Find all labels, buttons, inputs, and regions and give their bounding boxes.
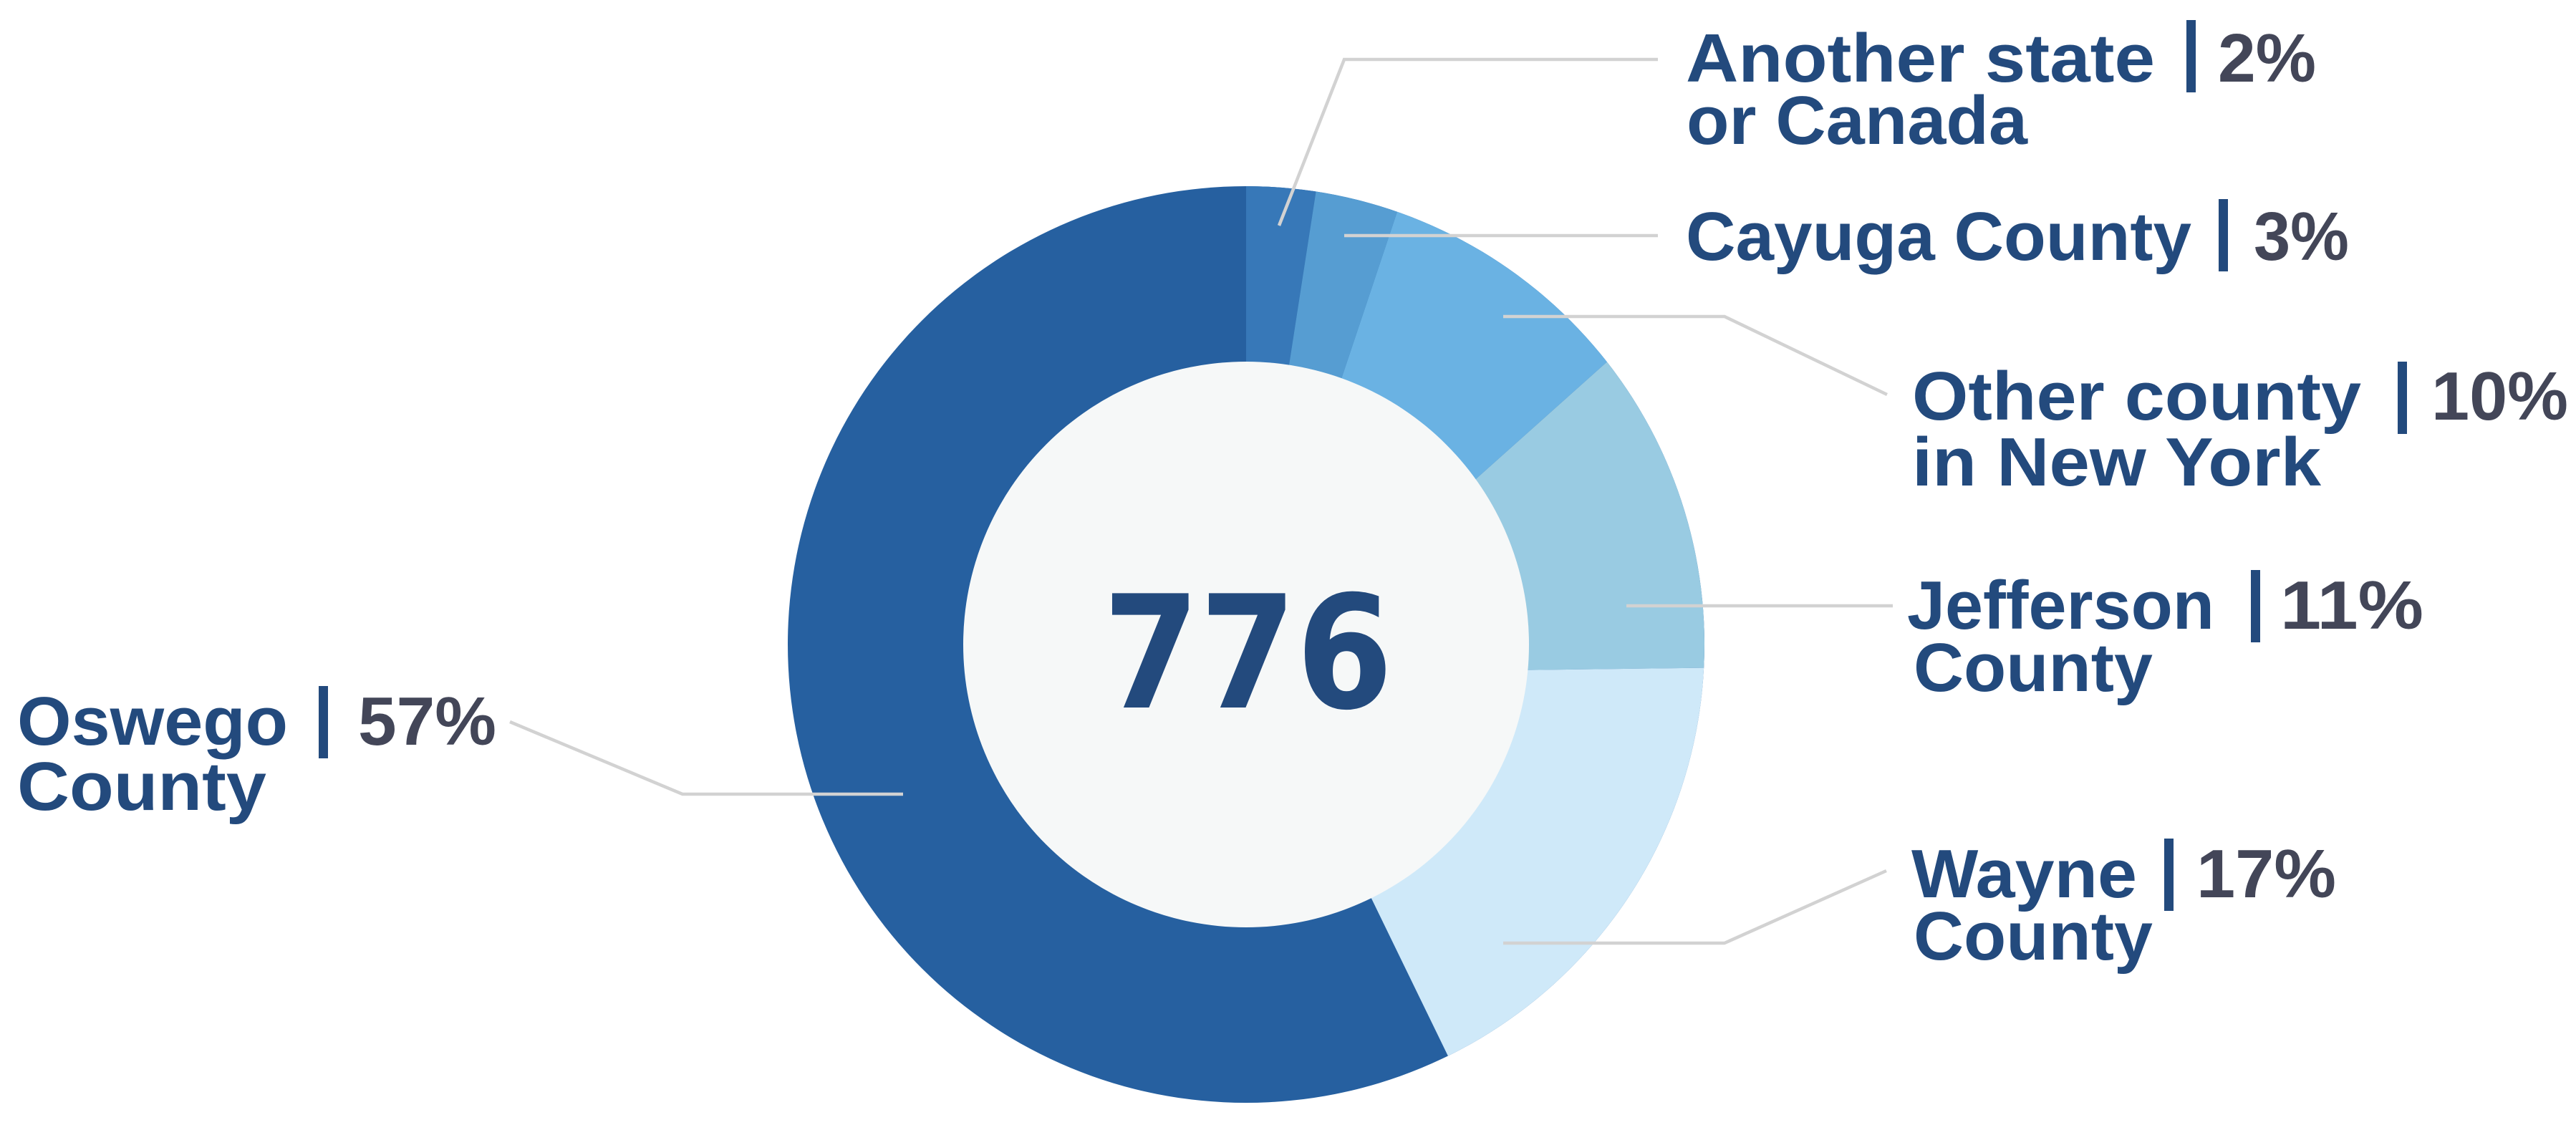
leader line: Another state — [1279, 59, 1658, 226]
leader line: Oswego — [510, 722, 903, 794]
segment: Cayuga County 3% — [1289, 192, 1397, 378]
label: Another state or Canada 2%: or Canada — [1687, 82, 2028, 159]
label: Jefferson County 11%: Jefferson — [1907, 567, 2214, 644]
donut centre — [963, 362, 1529, 927]
segment: Another state or Canada 2% — [1246, 186, 1316, 365]
label: Wayne County 17%: Wayne — [1911, 836, 2137, 912]
label: Jefferson County 11%: County — [1914, 629, 2153, 706]
leader line: Other county — [1503, 317, 1887, 395]
label: Other county in New York 10%: in New York — [1912, 424, 2322, 501]
leader line: Wayne — [1503, 871, 1886, 943]
total number: 776 — [1103, 562, 1393, 745]
label: Wayne County 17%: County — [1914, 898, 2153, 975]
leader line: Cayuga — [1344, 234, 1658, 237]
segment: Oswego County 57% — [788, 186, 1704, 1103]
label: Jefferson County 11%: 11% — [2280, 567, 2423, 644]
label: Wayne County 17% — [1911, 836, 2336, 975]
label: Oswego County 57%: Oswego — [17, 683, 288, 760]
segment: Other county in New York 10% — [1342, 212, 1607, 479]
label: Another state or Canada 2%: Another state — [1686, 20, 2155, 97]
leader line: Jefferson — [1626, 604, 1893, 607]
label: Cayuga County 3%: 3% — [2254, 198, 2349, 275]
clipped segments — [1246, 186, 1704, 1056]
label: Oswego County 57%: 57% — [358, 683, 496, 760]
segment: Jefferson County 11% — [1475, 362, 1704, 670]
label: Wayne County 17%: 17% — [2196, 836, 2336, 912]
label: Other county in New York 10% — [1912, 358, 2568, 501]
segment: Wayne County 17% — [1371, 667, 1704, 1056]
label: Cayuga County 3%: Cayuga County — [1686, 198, 2191, 275]
label: Other county in New York 10%: 10% — [2431, 358, 2568, 435]
label: Jefferson County 11% — [1907, 567, 2423, 706]
label: Oswego County 57%: County — [17, 748, 266, 825]
label: Oswego County 57% — [17, 683, 496, 825]
label: Other county in New York 10%: Other county — [1912, 358, 2361, 435]
donut chart — [788, 186, 1704, 1103]
label: Another state or Canada 2%: 2% — [2218, 20, 2316, 97]
label: Another state or Canada 2% — [1686, 20, 2316, 159]
